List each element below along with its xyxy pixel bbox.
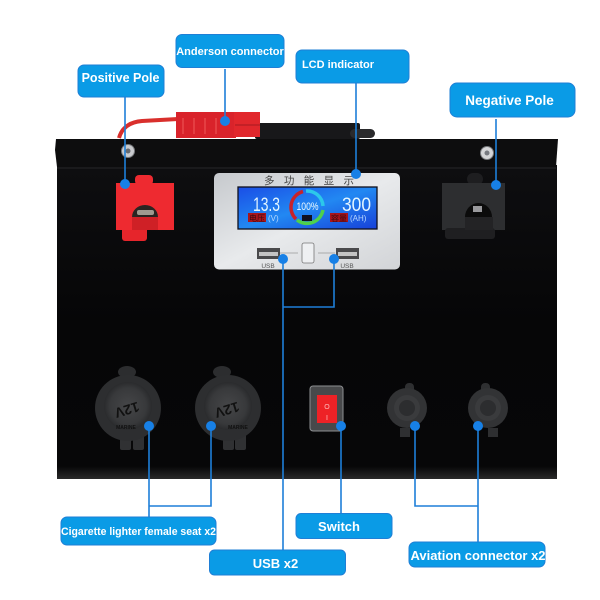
cigarette socket right: 12V <box>212 399 241 421</box>
label: Positive Pole: Positive Pole <box>82 71 159 85</box>
label: Anderson connector: Anderson connector <box>176 46 284 58</box>
negative terminal cover <box>442 173 505 239</box>
label: Switch <box>296 514 392 538</box>
label: USB x2 <box>210 550 346 575</box>
aviation connector right <box>468 383 508 437</box>
label: LCD indicator: LCD indicator <box>302 59 375 71</box>
label: Positive Pole <box>78 65 164 97</box>
USB port right <box>336 248 359 270</box>
handle <box>255 123 375 139</box>
cigarette socket right: MARINE <box>228 425 249 431</box>
LCD screen: 300 <box>342 195 371 216</box>
ring gauge <box>291 191 323 223</box>
cigarette socket right <box>195 366 261 450</box>
plate heading: 多 功 能 显 示 <box>264 174 354 187</box>
leader: Switch <box>336 421 346 513</box>
label: Negative Pole <box>450 83 575 117</box>
leader: Cigarette lighter <box>144 421 216 517</box>
leader: Aviation connector <box>410 421 483 542</box>
LCD screen: 13.3 <box>253 195 280 216</box>
screw left <box>122 144 134 158</box>
USB port left <box>257 248 280 270</box>
battery case <box>55 139 558 479</box>
cigarette socket left: MARINE <box>116 425 137 431</box>
positive terminal cover <box>116 175 174 241</box>
aviation connector left <box>387 383 427 437</box>
label: Aviation connector x2 <box>409 542 546 567</box>
display plate <box>214 173 400 270</box>
USB port right: USB <box>340 263 354 270</box>
cigarette socket left: 12V <box>112 399 141 421</box>
Anderson connector plug <box>176 112 260 138</box>
rocker switch: I <box>326 415 328 422</box>
rocker switch <box>310 386 343 431</box>
LCD screen: 100% <box>296 201 319 213</box>
label: Cigarette lighter female seat x2: Cigarette lighter female seat x2 <box>61 526 216 538</box>
USB port left: USB <box>261 263 275 270</box>
label: Negative Pole: Negative Pole <box>465 93 554 108</box>
red cable <box>119 119 178 138</box>
LCD screen: 容量 <box>331 213 347 223</box>
phone icon <box>280 243 335 263</box>
label: Switch: Switch <box>318 519 360 534</box>
leader: Anderson connector <box>220 69 230 126</box>
label: LCD indicator <box>296 50 409 83</box>
leader: Positive Pole <box>120 97 130 189</box>
LCD screen: (AH) <box>350 214 367 223</box>
LCD screen: (V) <box>268 214 279 223</box>
label: Aviation connector x2: Aviation connector x2 <box>410 548 546 563</box>
cigarette socket left <box>95 366 161 450</box>
leader: USB x2 <box>278 254 339 550</box>
LCD screen: 电压 <box>249 213 265 223</box>
rocker switch: O <box>324 404 330 411</box>
leader: Negative Pole <box>491 119 501 190</box>
label: USB x2: USB x2 <box>253 556 298 571</box>
screw right <box>480 146 494 160</box>
label: Anderson connector <box>176 34 284 68</box>
label: Cigarette lighter female seat x2 <box>61 517 216 545</box>
LCD screen <box>238 187 377 229</box>
leader: LCD indicator <box>351 83 361 179</box>
